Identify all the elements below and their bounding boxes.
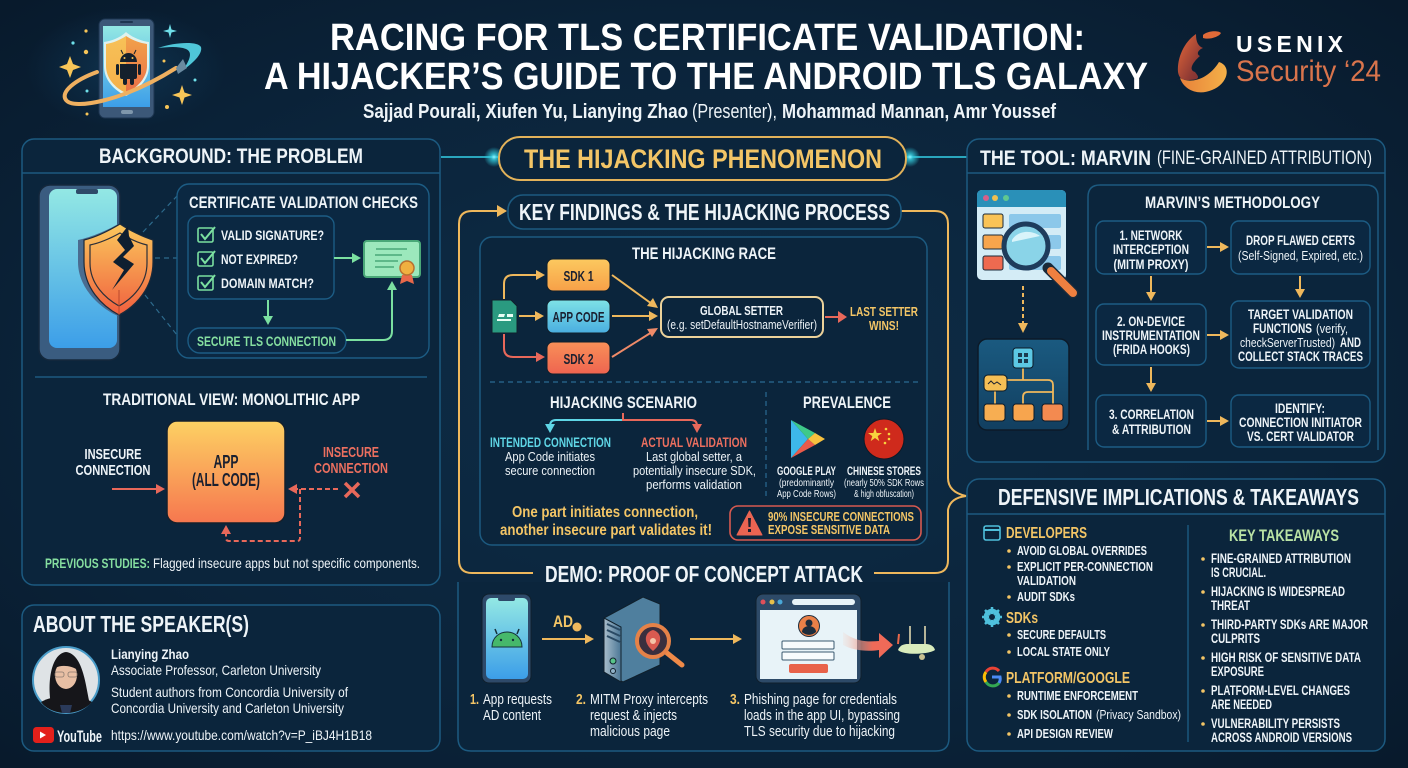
panel: certificate validation checks: CERTIFICATE VALIDATION CHECKS: [189, 193, 418, 212]
checklist: DOMAIN MATCH?: [221, 275, 314, 291]
arrow: row 3: [1207, 416, 1229, 426]
step: network interception: (MITM PROXY): [1114, 257, 1188, 272]
youtube logo and link: [33, 727, 372, 746]
icon: google play: [791, 420, 825, 458]
heading: the hijacking race: THE HIJACKING RACE: [632, 244, 776, 263]
label: insecure connection left: [76, 446, 150, 479]
text: actual validation: performs validation: [646, 477, 742, 492]
step: correlation and attribution: 3. CORRELATION: [1109, 407, 1194, 422]
list: developers: AVOID GLOBAL OVERRIDES: [1017, 543, 1147, 558]
pill: the hijacking phenomenon: THE HIJACKING PHENOMENON: [524, 144, 882, 174]
box: global setter: GLOBAL SETTER: [700, 303, 783, 318]
arrows to global setter: [612, 275, 658, 357]
step: network interception: INTERCEPTION: [1113, 242, 1189, 257]
list: key takeaways: THREAT: [1211, 598, 1251, 613]
arrows into sdks: [504, 270, 545, 362]
logo: USENIX Security 24: USENIX: [1236, 31, 1344, 57]
icon: android shield phone with orbit: [26, 8, 226, 128]
label: google play: [777, 466, 836, 500]
box: app all code: [167, 421, 285, 523]
list: developers: AUDIT SDKs: [1017, 589, 1075, 604]
step: correlation and attribution: [1096, 395, 1206, 447]
step: target validation functions: checkServerTrusted): [1240, 335, 1335, 350]
arrow: ad content: AD: [553, 612, 573, 631]
icon: router: [898, 626, 935, 660]
caption: step 2: malicious page: [590, 723, 670, 740]
label: chinese stores: & high obfuscation): [854, 489, 914, 500]
heading: prevalence: PREVALENCE: [803, 393, 891, 412]
list: key takeaways: ARE NEEDED: [1211, 697, 1272, 712]
arrow: ad content: [542, 612, 594, 644]
label: google play: GOOGLE PLAY: [777, 466, 836, 478]
icon: certificate: [364, 241, 420, 284]
arrow to certificate: [334, 253, 361, 263]
step: identify: VS. CERT VALIDATOR: [1247, 429, 1354, 444]
icon: magnifier with bug: [637, 625, 682, 665]
step: identify: IDENTIFY:: [1275, 401, 1325, 416]
box: sdk 1: [547, 259, 610, 291]
icon: phone: [39, 185, 120, 360]
heading: demo: DEMO: PROOF OF CONCEPT ATTACK: [545, 561, 863, 587]
step: on-device instrumentation: (FRIDA HOOKS): [1113, 342, 1190, 357]
authors: Sajjad Pourali, Xiufen Yu, Lianying Zhao: [363, 101, 688, 123]
text: previous studies: Flagged insecure apps but not specific components.: [153, 555, 420, 571]
caption: step 2: [576, 691, 708, 740]
callout: one part initiates: [500, 504, 712, 539]
arrow: proxy to phishing: [690, 634, 742, 644]
checklist: [198, 227, 324, 291]
step: target validation functions: (verify,: [1316, 321, 1348, 336]
speaker bio: Lianying Zhao: [111, 646, 189, 662]
arrow: dashed down: [1018, 286, 1028, 333]
panel: marvin's methodology: MARVIN’S METHODOLOGY: [1145, 193, 1321, 212]
icon: app window with magnifier: [977, 190, 1073, 293]
icon: gear: [982, 607, 1002, 627]
list: sdks: SDKs: [1006, 610, 1038, 627]
icon: china flag circle: [864, 419, 904, 459]
list: key takeaways: [1201, 526, 1368, 745]
caption: step 1: 1.: [470, 691, 479, 708]
label: last setter wins: [850, 304, 918, 333]
step: identify: [1231, 395, 1370, 447]
list: sdks: [1006, 610, 1110, 659]
arrow: dashed loop with x: [221, 483, 359, 541]
text: actual validation: potentially insecure SDK,: [633, 463, 756, 478]
text: previous studies: PREVIOUS STUDIES:: [45, 555, 150, 571]
label: insecure connection right: CONNECTION: [314, 460, 388, 477]
list: developers: DEVELOPERS: [1006, 525, 1087, 542]
heading: the tool: [980, 147, 1372, 170]
list: sdks: LOCAL STATE ONLY: [1017, 644, 1110, 659]
list: platform google: [1006, 670, 1181, 741]
step: identify: CONNECTION INITIATOR: [1239, 415, 1362, 430]
label: last setter wins: WINS!: [869, 318, 899, 333]
logo: USENIX Security 24: Security ‘24: [1236, 55, 1381, 88]
icon: proxy server: [604, 597, 660, 682]
list: developers: VALIDATION: [1017, 573, 1076, 588]
pill: key findings: [508, 195, 901, 229]
heading: traditional view: TRADITIONAL VIEW: MONOLITHIC APP: [103, 390, 360, 409]
text: intended connection: [490, 434, 611, 478]
icon: google g: [984, 668, 1000, 686]
step: target validation functions: FUNCTIONS: [1253, 321, 1312, 336]
arrow down: [263, 300, 273, 325]
icon: phishing browser: [756, 594, 861, 683]
callout: one part initiates: One part initiates connection,: [512, 504, 698, 521]
step: target validation functions: [1231, 301, 1370, 368]
heading: the tool: THE TOOL: MARVIN: [980, 147, 1151, 170]
callout: 90 percent insecure: [730, 506, 921, 540]
checklist: NOT EXPIRED?: [221, 251, 298, 267]
pill: the hijacking phenomenon: [499, 137, 906, 180]
step: drop flawed certs: [1231, 221, 1370, 274]
caption: step 2: MITM Proxy intercepts: [590, 691, 708, 708]
speaker photo: [33, 647, 99, 713]
list: key takeaways: FINE-GRAINED ATTRIBUTION: [1211, 551, 1351, 566]
box: sdk 1: SDK 1: [564, 268, 594, 285]
caption: step 3: loads in the app UI, bypassing: [744, 707, 900, 724]
box: sdk 2: [547, 342, 610, 374]
caption: step 1: AD content: [483, 707, 542, 724]
text: intended connection: secure connection: [505, 463, 595, 478]
pill: secure tls connection: SECURE TLS CONNECTION: [197, 333, 336, 349]
list: platform google: (Privacy Sandbox): [1096, 707, 1181, 722]
panel: background the problem: [22, 139, 440, 585]
callout: one part initiates: another insecure part validates it!: [500, 522, 712, 539]
icon: hierarchy diagram: [978, 339, 1069, 430]
box: global setter: (e.g. setDefaultHostnameVerifier): [667, 318, 817, 332]
list: key takeaways: PLATFORM-LEVEL CHANGES: [1211, 683, 1350, 698]
text: intended connection: INTENDED CONNECTION: [490, 434, 611, 450]
label: google play: App Code Rows): [777, 489, 836, 500]
list: developers: [1006, 525, 1153, 604]
speaker bio: Student authors from Concordia University of: [111, 684, 348, 700]
pill: secure tls connection: [188, 328, 346, 353]
caption: step 3: Phishing page for credentials: [744, 691, 897, 708]
step: drop flawed certs: DROP FLAWED CERTS: [1246, 233, 1355, 248]
caption: step 2: request & injects: [590, 707, 677, 724]
step: network interception: [1096, 221, 1206, 274]
arrow: exfiltration swoosh: [843, 632, 893, 658]
panel: defensive implications and takeaways: [967, 479, 1385, 751]
list: key takeaways: EXPOSURE: [1211, 664, 1264, 679]
step: network interception: 1. NETWORK: [1120, 228, 1183, 243]
list: key takeaways: KEY TAKEAWAYS: [1229, 526, 1339, 545]
speaker bio: [111, 646, 348, 716]
arrows: row 2: [1146, 330, 1229, 392]
speaker bio: Concordia University and Carleton University: [111, 700, 344, 716]
callout: 90 percent insecure: 90% INSECURE CONNECTIONS: [768, 509, 914, 524]
authors: [363, 101, 1056, 123]
caption: step 2: 2.: [576, 691, 586, 708]
list: key takeaways: HIJACKING IS WIDESPREAD: [1211, 584, 1345, 599]
label: insecure connection left: CONNECTION: [76, 462, 150, 479]
icon: demo phone: [482, 594, 531, 683]
box: sdk 2: SDK 2: [564, 351, 594, 368]
youtube logo and link: https://www.youtube.com/watch?v=P_iBJ4H1B18: [111, 727, 372, 743]
arrow to last setter wins: [825, 311, 847, 323]
label: google play: (predominantly: [779, 478, 834, 489]
label: insecure connection right: INSECURE: [323, 444, 379, 461]
caption: step 3: [730, 691, 900, 740]
list: platform google: RUNTIME ENFORCEMENT: [1017, 688, 1138, 703]
youtube logo and link: YouTube: [57, 727, 102, 746]
step: target validation functions: TARGET VALIDATION: [1248, 307, 1353, 322]
list: platform google: API DESIGN REVIEW: [1017, 726, 1114, 741]
caption: step 3: TLS security due to hijacking: [744, 723, 895, 740]
label: insecure connection left: INSECURE: [84, 446, 142, 463]
list: sdks: SECURE DEFAULTS: [1017, 627, 1106, 642]
label: chinese stores: CHINESE STORES: [847, 466, 921, 478]
box: app all code: (ALL CODE): [192, 470, 260, 490]
arrow: incoming: [112, 484, 165, 494]
label: chinese stores: [844, 466, 924, 500]
icon: developer window: [984, 526, 1000, 540]
checklist: VALID SIGNATURE?: [221, 227, 324, 243]
list: key takeaways: ACROSS ANDROID VERSIONS: [1211, 730, 1352, 745]
text: intended connection: App Code initiates: [505, 449, 595, 464]
caption: step 1: [470, 691, 552, 724]
box: app code: APP CODE: [552, 309, 604, 326]
step: target validation functions: COLLECT STACK TRACES: [1238, 349, 1363, 364]
box: app code: [547, 300, 610, 333]
heading: hijacking scenario: HIJACKING SCENARIO: [550, 393, 697, 412]
panel: marvin's methodology: [1088, 185, 1378, 450]
connectors from center pill: [441, 147, 967, 167]
gold frame arrow: [459, 205, 966, 573]
title: [264, 17, 1148, 98]
list: key takeaways: IS CRUCIAL.: [1211, 565, 1266, 580]
dashed connector lines: [143, 196, 177, 335]
title: RACING FOR TLS CERTIFICATE VALIDATION:: [330, 17, 1085, 59]
step: on-device instrumentation: 2. ON-DEVICE: [1117, 314, 1185, 329]
icon: apk file: [492, 300, 517, 333]
label: chinese stores: (nearly 50% SDK Rows: [844, 478, 924, 489]
list: developers: EXPLICIT PER-CONNECTION: [1017, 559, 1153, 574]
step: on-device instrumentation: [1096, 304, 1206, 365]
step: drop flawed certs: (Self-Signed, Expired, etc.): [1238, 248, 1363, 263]
list: platform google: SDK ISOLATION: [1017, 707, 1092, 722]
caption: step 1: App requests: [483, 691, 552, 708]
heading: speakers: ABOUT THE SPEAKER(S): [33, 611, 249, 637]
panel: hijacking race and scenario: [480, 237, 927, 545]
step: on-device instrumentation: INSTRUMENTATION: [1102, 328, 1200, 343]
title: A HIJACKER’S GUIDE TO THE ANDROID TLS GALAXY: [264, 56, 1148, 98]
authors: (Presenter),: [692, 101, 777, 123]
panel: certificate validation checks: [177, 184, 429, 358]
text: actual validation: ACTUAL VALIDATION: [641, 434, 747, 450]
branch arrows: [545, 413, 702, 433]
label: last setter wins: LAST SETTER: [850, 304, 918, 319]
callout: 90 percent insecure: EXPOSE SENSITIVE DATA: [768, 522, 890, 537]
step: correlation and attribution: & ATTRIBUTION: [1112, 422, 1191, 437]
box: app all code: APP: [214, 452, 238, 472]
list: platform google: PLATFORM/GOOGLE: [1006, 670, 1130, 687]
speaker bio: Associate Professor, Carleton University: [111, 662, 321, 678]
text: actual validation: [633, 434, 756, 492]
list: key takeaways: CULPRITS: [1211, 631, 1260, 646]
text: actual validation: Last global setter, a: [646, 449, 743, 464]
panel: about the speakers: [22, 605, 440, 751]
panel: the tool marvin: [967, 139, 1385, 462]
list: key takeaways: VULNERABILITY PERSISTS: [1211, 716, 1340, 731]
step: target validation functions: AND: [1340, 335, 1361, 350]
authors: Mohammad Mannan, Amr Youssef: [782, 101, 1056, 123]
pill: key findings: KEY FINDINGS & THE HIJACKING PROCESS: [519, 199, 890, 225]
heading: background: BACKGROUND: THE PROBLEM: [99, 145, 363, 168]
caption: step 3: 3.: [730, 691, 740, 708]
arrow up to certificate: [346, 281, 397, 340]
icon: cracked shield: [78, 224, 153, 316]
panel: demo proof of concept: [458, 561, 949, 751]
box: global setter: [661, 297, 823, 337]
logo: USENIX Security 24: [1178, 31, 1381, 92]
arrows: row 1: [1146, 242, 1305, 301]
label: insecure connection right: [314, 444, 388, 477]
text: previous studies: [45, 555, 420, 571]
